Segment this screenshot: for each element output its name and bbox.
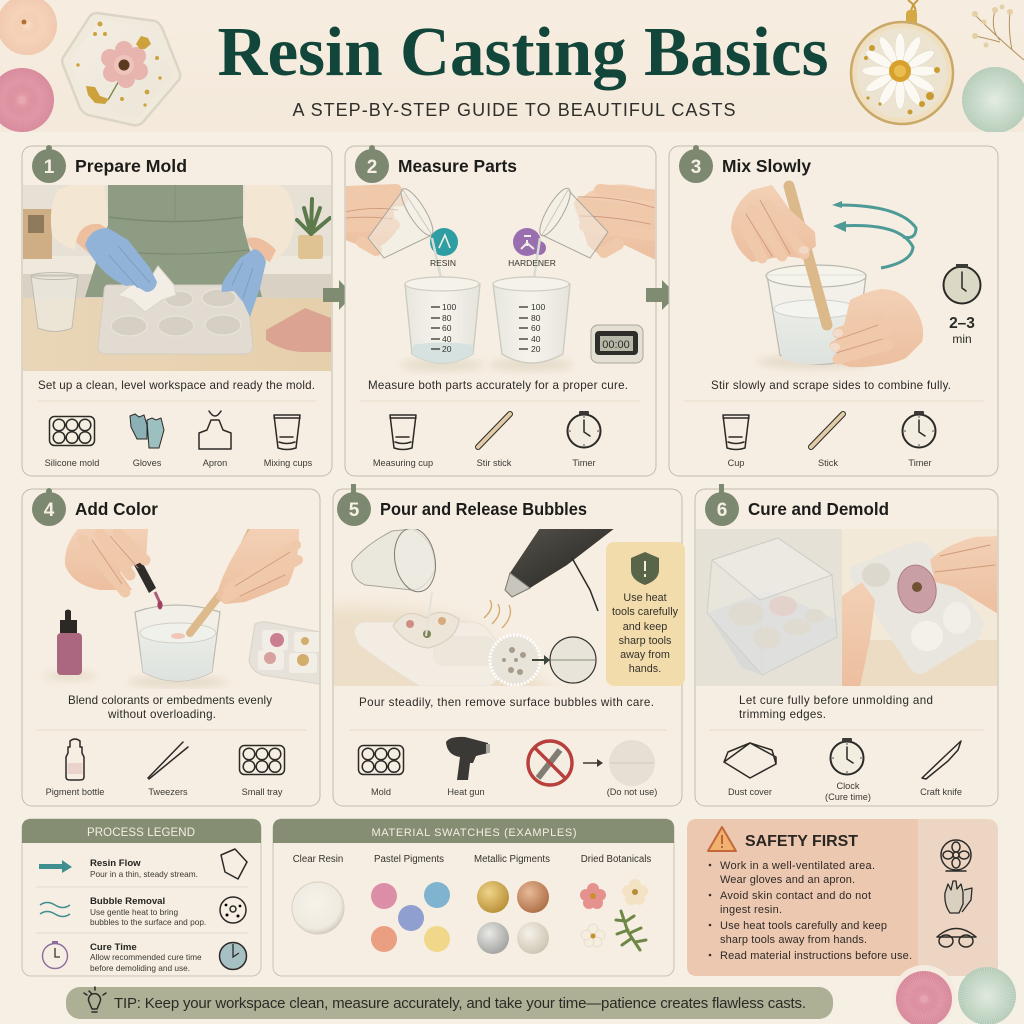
pastel pigments: Pastel Pigments (374, 854, 444, 865)
cup (31, 276, 78, 332)
photo: adding pigment (44, 529, 320, 688)
caption (739, 694, 933, 721)
photo: pouring into measuring cups: 100 (531, 302, 545, 312)
photo: pouring into measuring cups: 20 (531, 344, 541, 354)
tool: pigment bottle (46, 739, 104, 797)
caption: Pour steadily, then remove surface bubbles with care. (359, 696, 654, 709)
photo: pouring into measuring cups: HARDENER (508, 258, 556, 268)
photo: pouring and heat gun (334, 529, 614, 686)
callout: heat safety: and keep (623, 621, 667, 633)
badge 5: 5 (349, 500, 360, 521)
left hand (346, 197, 396, 246)
pink towel (266, 308, 331, 352)
pastel pigments (371, 854, 450, 952)
safety bullets: Read material instructions before use. (720, 950, 912, 962)
safety bullets (709, 860, 912, 962)
icon: goggles (937, 928, 976, 947)
pom-pom: bottom sage (953, 962, 1021, 1024)
tool: stir stick: Stir stick (477, 458, 512, 468)
tool: timer (902, 411, 936, 468)
tool: timer (568, 411, 600, 468)
tool: apron: Apron (203, 458, 227, 468)
badge 6: 6 (717, 500, 727, 521)
photo: pouring into measuring cups: 80 (531, 313, 541, 323)
wooden stick (190, 529, 252, 633)
cure time row: Cure Time (90, 942, 137, 953)
safety bullets: Avoid skin contact and do not (720, 890, 871, 902)
tool: craft knife (920, 741, 962, 797)
photo: pouring into measuring cups: 80 (442, 313, 452, 323)
subtitle: A STEP-BY-STEP GUIDE TO BEAUTIFUL CASTS (292, 100, 736, 120)
silicone mold (98, 285, 253, 354)
tool: small tray (240, 746, 284, 797)
caption: Blend colorants or embedments evenly (68, 694, 272, 707)
left hand (65, 529, 148, 590)
tool: stick: Stick (818, 458, 838, 468)
icon: swatch (do not use): (Do not use) (607, 787, 657, 797)
tip bar (66, 987, 833, 1019)
glass of resin (767, 275, 866, 364)
panel: material swatches: MATERIAL SWATCHES (EXAMPLES) (372, 827, 576, 839)
pot plant (298, 235, 323, 259)
pom-pom: pink (0, 68, 54, 132)
pom-pom: bottom pink (892, 965, 956, 1024)
resin flow row (39, 849, 247, 879)
tool: apron (199, 411, 231, 468)
tool: dust cover: Dust cover (728, 787, 772, 797)
tool: silicone mold (45, 416, 99, 468)
sweater arms (51, 185, 110, 250)
stirring arrows (838, 205, 916, 238)
stir stick (789, 186, 827, 325)
right cup (542, 190, 608, 258)
cloth (118, 266, 176, 312)
tool: mold (358, 746, 404, 797)
resin daisy pendant (851, 0, 953, 124)
resin and hardener badges (430, 228, 458, 256)
tool: measuring cup (373, 415, 433, 468)
bubble removal row: Use gentle heat to bring (90, 907, 178, 917)
heading: Mix Slowly (722, 156, 811, 176)
safety bullets: Work in a well-ventilated area. (720, 860, 875, 872)
clock: 2-3 min: min (952, 332, 972, 346)
safety bullets: Wear gloves and an apron. (720, 874, 855, 886)
tray base (707, 590, 837, 675)
cure time row (42, 941, 246, 973)
caption: without overloading. (107, 708, 216, 721)
tool: mold: Mold (371, 787, 391, 797)
tool: timer: Timer (908, 458, 932, 468)
callout: heat safety: Use heat (623, 592, 667, 604)
cure time row: before demoliding and use. (90, 963, 190, 973)
resin flow row: Pour in a thin, steady stream. (90, 869, 198, 879)
tool: clock: (Cure time) (825, 792, 871, 802)
lower hand (835, 289, 923, 367)
metallic pigments: Metallic Pigments (474, 854, 550, 865)
panel: step 1 prepare mold (22, 145, 332, 476)
panel: safety first (687, 819, 998, 976)
tool: dust cover (724, 743, 776, 797)
icon: swatch (do not use) (607, 740, 657, 797)
tool: clock: Clock (837, 781, 860, 791)
tool: stick (811, 414, 843, 468)
tool: stir stick (477, 414, 512, 468)
safety bullets: sharp tools away from hands. (720, 934, 867, 946)
badge 6 (705, 484, 739, 526)
photo: gloved hands wiping mold (23, 185, 331, 371)
badge 4 (32, 488, 66, 526)
badge 2 (355, 145, 389, 183)
tool: craft knife: Craft knife (920, 787, 962, 797)
callout: heat safety: away from (620, 649, 670, 661)
arrow: step 2 to 3 (646, 280, 677, 310)
icon: do not use (528, 741, 572, 785)
blue gloves (85, 228, 157, 292)
tool: cup (723, 415, 749, 468)
heading: Prepare Mold (75, 156, 187, 176)
panel: material swatches (273, 819, 674, 976)
badge 1: 1 (44, 157, 55, 178)
arrow: step 1 to 2 (323, 280, 353, 310)
tool: mixing cups: Mixing cups (264, 458, 313, 468)
panel: step 4 add color (22, 488, 320, 806)
photo: pouring into measuring cups: RESIN (430, 258, 456, 268)
caption: Let cure fully before unmolding and (739, 694, 933, 707)
panel: step 2 measure parts (340, 145, 660, 476)
callout: heat safety: sharp tools (619, 635, 672, 647)
tool: pigment bottle: Pigment bottle (46, 787, 104, 797)
bubble removal row: bubbles to the surface and pop. (90, 917, 206, 927)
bubble removal row: Bubble Removal (90, 896, 165, 907)
badge 1 (32, 145, 66, 183)
caption (68, 694, 272, 721)
clock: 2-3 min (944, 264, 980, 346)
photo: pouring into measuring cups: 00:00 (602, 339, 630, 351)
hands (930, 536, 1000, 615)
icon: warning triangle (708, 827, 736, 851)
icon: shield (631, 552, 659, 585)
icon: fan (941, 840, 971, 871)
resin flow row: Resin Flow (90, 858, 141, 869)
title: Resin Casting Basics (218, 14, 828, 91)
glass (135, 605, 220, 681)
clear resin (292, 854, 344, 934)
pom-pom: sage (962, 67, 1024, 132)
bubble removal row (40, 896, 246, 927)
silicone mold in hand (850, 542, 985, 674)
photo: pouring into measuring cups: 40 (531, 334, 541, 344)
photo: pouring into measuring cups: 60 (442, 323, 452, 333)
caption: Set up a clean, level workspace and ready the mold. (38, 379, 315, 392)
tool: small tray: Small tray (242, 787, 283, 797)
photo: pouring into measuring cups (340, 184, 660, 371)
tool: gloves: Gloves (133, 458, 162, 468)
heading: Pour and Release Bubbles (380, 499, 587, 519)
icon: gloves (945, 881, 972, 913)
left cup (368, 190, 432, 258)
arrow (583, 759, 603, 767)
heading: SAFETY FIRST (745, 833, 859, 850)
cure time row: Allow recommended cure time (90, 952, 202, 962)
right hand (216, 529, 299, 604)
callout: heat safety: hands. (629, 663, 661, 675)
photo: pouring into measuring cups: 60 (531, 323, 541, 333)
pigment bottle (57, 633, 82, 675)
callout: heat safety: tools carefully (612, 606, 679, 618)
heading: Cure and Demold (748, 499, 889, 519)
panel: process legend (22, 819, 261, 976)
tool: cup: Cup (728, 458, 744, 468)
tool: tweezers: Tweezers (148, 787, 188, 797)
safety bullets: Use heat tools carefully and keep (720, 920, 887, 932)
heading: Measure Parts (398, 156, 517, 176)
tip bar: TIP: Keep your workspace clean, measure accurately, and take your time—patience creates flawless casts. (114, 995, 806, 1012)
clear dome (707, 538, 837, 675)
tool: tweezers (148, 742, 188, 797)
panel: step 6 cure and demold (695, 484, 1000, 806)
panel: step 3 mix slowly (669, 145, 998, 476)
dried gypsophila sprig (972, 4, 1024, 60)
tool: measuring cup: Measuring cup (373, 458, 433, 468)
right hand (575, 184, 660, 262)
panel: step 5 pour and release bubbles (300, 484, 685, 806)
embedment tray (249, 622, 320, 684)
tool: heat gun: Heat gun (447, 787, 485, 797)
photo: hands stirring (731, 185, 923, 369)
badge 5 (337, 484, 371, 526)
dried botanicals: Dried Botanicals (581, 854, 651, 865)
photo: pouring into measuring cups: 40 (442, 334, 452, 344)
safety bullets: ingest resin. (720, 904, 782, 916)
header band (0, 0, 1024, 138)
metallic pigments (474, 854, 550, 954)
photo: dust cover and demolding (696, 529, 1000, 686)
heading: Add Color (75, 499, 158, 519)
tool: mixing cups (264, 415, 313, 468)
resin hexagon dish (62, 13, 180, 125)
badge 3: 3 (691, 157, 701, 178)
tool: clock (825, 738, 871, 802)
photo: pouring into measuring cups: 100 (442, 302, 456, 312)
dropper (134, 562, 156, 593)
badge 4: 4 (44, 500, 55, 521)
caption: trimming edges. (739, 708, 826, 721)
dried botanicals (580, 854, 651, 950)
panel: process legend: PROCESS LEGEND (87, 827, 195, 839)
caption: Measure both parts accurately for a proper cure. (368, 379, 628, 392)
callout: heat safety (606, 542, 685, 686)
tool: heat gun (446, 737, 490, 797)
icon: light bulb (84, 987, 106, 1012)
clock: 2-3 min: 2–3 (949, 315, 975, 332)
badge 3 (679, 145, 713, 183)
tool: gloves (130, 414, 164, 468)
badge 2: 2 (367, 157, 377, 178)
tool: timer: Timer (572, 458, 596, 468)
photo: pouring into measuring cups: 20 (442, 344, 452, 354)
pom-pom: peach (0, 0, 57, 55)
upper hand (731, 185, 816, 262)
clear resin: Clear Resin (293, 854, 343, 865)
caption: Stir slowly and scrape sides to combine fully. (711, 379, 951, 392)
tool: silicone mold: Silicone mold (45, 458, 99, 468)
